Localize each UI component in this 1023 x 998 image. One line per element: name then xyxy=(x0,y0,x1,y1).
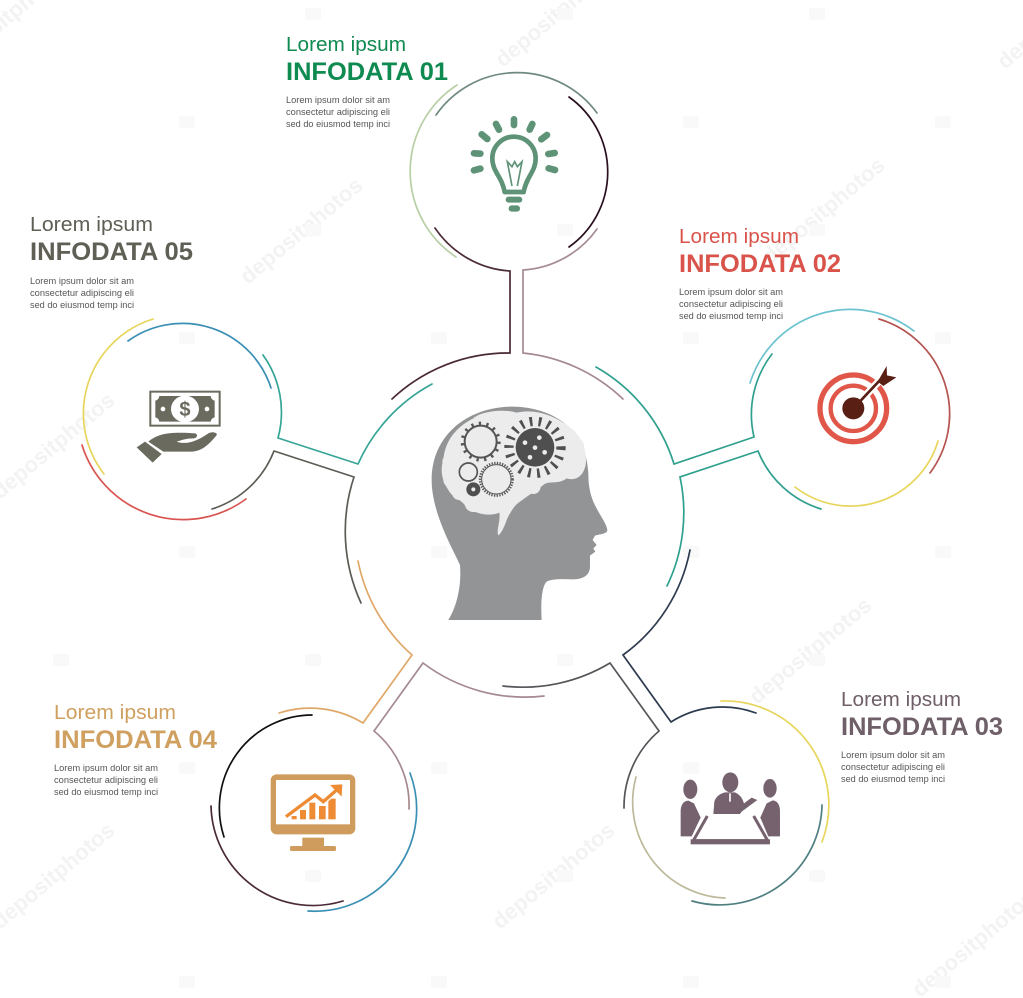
heading: infodata 03: Lorem ipsum xyxy=(841,689,961,711)
watermark: depositphotos xyxy=(744,592,876,709)
panel: node 04 xyxy=(54,702,417,911)
heading: infodata 05: sed do eiusmod temp inci xyxy=(30,300,134,311)
panel: node 01 xyxy=(286,34,608,257)
heading: infodata 05 xyxy=(30,214,193,311)
watermark: depositphotos xyxy=(487,817,619,934)
node 05 ring xyxy=(82,319,271,520)
heading: infodata 03: INFODATA 03 xyxy=(841,713,1003,741)
head silhouette xyxy=(432,407,607,620)
arc: left node lower connector xyxy=(212,451,361,603)
icon: target with arrow xyxy=(820,366,896,442)
heading: infodata 04: INFODATA 04 xyxy=(54,726,217,754)
node 04 ring xyxy=(211,715,417,911)
arc: lower right grey connector xyxy=(503,663,659,808)
arc: lower left orange connector xyxy=(279,561,412,723)
panel: connecting ring arcs xyxy=(212,228,821,809)
heading: infodata 02 xyxy=(679,226,841,322)
arc: lower left mauve connector xyxy=(374,663,544,809)
heading: infodata 04: Lorem ipsum xyxy=(54,702,176,724)
heading: infodata 04: Lorem ipsum dolor sit am xyxy=(54,763,158,774)
heading: infodata 01: Lorem ipsum dolor sit am xyxy=(286,95,390,106)
icon: hand holding banknote xyxy=(137,392,220,463)
heading: infodata 03: sed do eiusmod temp inci xyxy=(841,774,945,785)
node 03 ring xyxy=(633,701,829,905)
heading: infodata 02: Lorem ipsum dolor sit am xyxy=(679,287,783,298)
panel: node 02 xyxy=(679,226,950,506)
watermark: depositphotos xyxy=(235,172,367,289)
brain xyxy=(442,411,586,535)
heading: infodata 05: Lorem ipsum dolor sit am xyxy=(30,276,134,287)
node 01 ring xyxy=(410,73,608,257)
arc: top node left stem xyxy=(392,228,510,399)
heading: infodata 01: consectetur adipiscing eli xyxy=(286,107,390,118)
gears xyxy=(459,421,561,496)
arc: top node right stem xyxy=(523,229,623,399)
heading: infodata 04 xyxy=(54,702,217,798)
heading: infodata 03: consectetur adipiscing eli xyxy=(841,762,945,773)
heading: infodata 05: INFODATA 05 xyxy=(30,238,193,266)
node 02 ring xyxy=(750,309,950,506)
heading: infodata 01: INFODATA 01 xyxy=(286,58,448,86)
heading: infodata 03: Lorem ipsum dolor sit am xyxy=(841,750,945,761)
heading: infodata 01 xyxy=(286,34,448,130)
heading: infodata 02: sed do eiusmod temp inci xyxy=(679,311,783,322)
icon: head with brain and gears xyxy=(432,407,607,620)
arc: lower right navy connector xyxy=(623,550,756,722)
arc: right node upper connector xyxy=(596,354,772,464)
watermark: depositphotos xyxy=(757,152,889,269)
heading: infodata 02: INFODATA 02 xyxy=(679,250,841,278)
heading: infodata 03 xyxy=(841,689,1003,785)
heading: infodata 05: Lorem ipsum xyxy=(30,214,153,236)
heading: infodata 05: consectetur adipiscing eli xyxy=(30,288,134,299)
heading: infodata 02: consectetur adipiscing eli xyxy=(679,299,783,310)
icon: hand holding banknote: $ xyxy=(179,399,191,421)
heading: infodata 02: Lorem ipsum xyxy=(679,226,799,248)
icon: light bulb xyxy=(474,119,555,212)
arc: left node upper connector xyxy=(263,355,432,464)
heading: infodata 04: sed do eiusmod temp inci xyxy=(54,787,158,798)
heading: infodata 01: sed do eiusmod temp inci xyxy=(286,119,390,130)
heading: infodata 04: consectetur adipiscing eli xyxy=(54,775,158,786)
panel: node 05 xyxy=(30,214,271,520)
heading: infodata 01: Lorem ipsum xyxy=(286,34,406,56)
icon: monitor with rising chart xyxy=(271,774,355,851)
arc: right node lower connector xyxy=(667,451,821,586)
panel: node 03 xyxy=(633,689,1003,905)
icon: meeting people xyxy=(681,772,780,844)
